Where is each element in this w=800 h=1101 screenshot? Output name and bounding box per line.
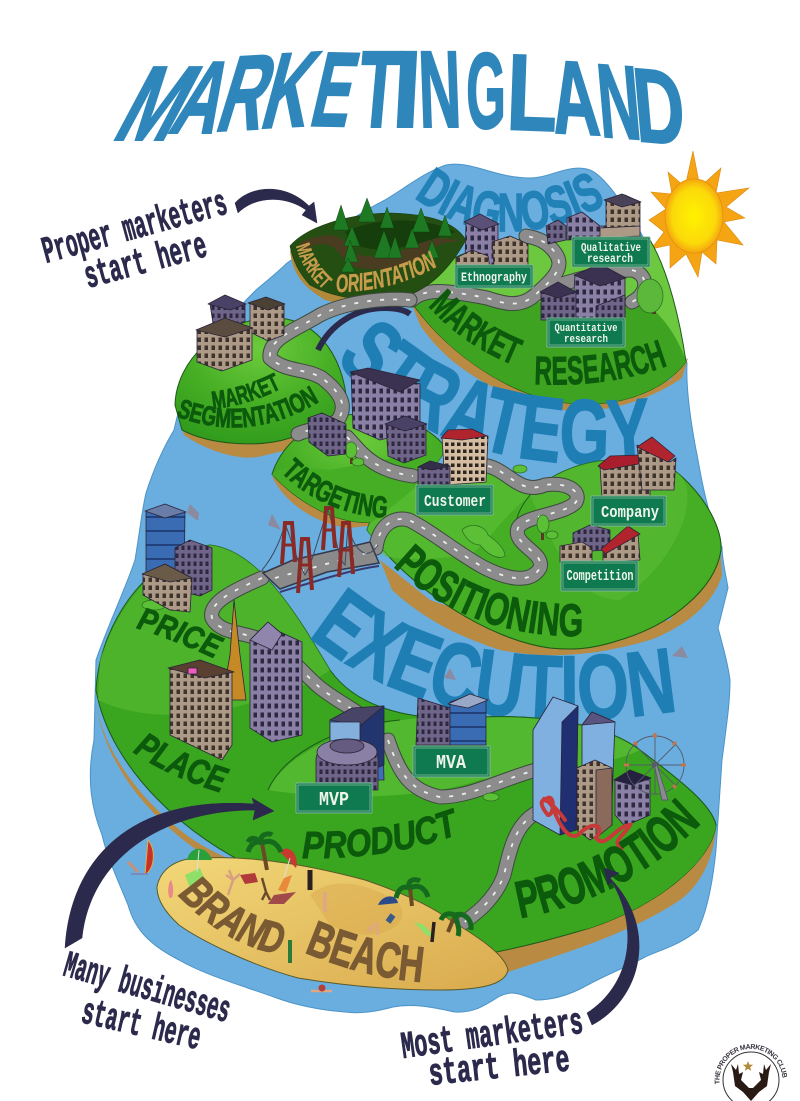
label: Price: PRICE — [136, 608, 226, 658]
label: Market Orientation: MARKET — [296, 242, 333, 288]
buildings: promotion district — [533, 697, 651, 840]
sign: Quantitative research: research — [564, 334, 608, 346]
section heading: Diagnosis: DIAGNOSIS — [415, 166, 602, 232]
sign: MVA: MVA — [436, 752, 467, 774]
sign: Competition — [561, 561, 638, 591]
callout: Many businesses start here: Many businesses — [59, 946, 235, 1034]
panel: positioning island — [367, 458, 722, 655]
arrow: proper marketers — [235, 189, 317, 223]
icon: suspension bridge — [262, 508, 379, 593]
label: Market Orientation: ORIENTATION — [336, 250, 436, 292]
sign: Qualitative research: research — [587, 253, 633, 266]
road: market research — [412, 236, 645, 304]
label: Market Research — [428, 288, 667, 386]
arrow: most marketers — [587, 868, 639, 1025]
icon: red slide — [542, 798, 630, 848]
heading: title Marketingland: N — [593, 43, 645, 163]
label: Positioning: POSITIONING — [394, 544, 582, 637]
panel: execution main island — [96, 545, 716, 985]
buildings: segmentation district — [196, 295, 285, 371]
heading: title Marketingland: M — [98, 44, 219, 163]
buildings: price and place district — [142, 504, 302, 760]
sign: Qualitative research — [572, 237, 650, 267]
sign: Customer: Customer — [424, 493, 486, 512]
redraw: land over heading overlap — [268, 437, 721, 955]
road: segmentation to targeting — [270, 299, 413, 476]
callout: Proper marketers start here: Proper marketers — [38, 184, 232, 275]
sign: MVP — [296, 783, 372, 813]
label: Promotion: PROMOTION — [514, 798, 700, 918]
label: Brand Beach: BRAND — [178, 876, 284, 952]
heading: title Marketingland: D — [629, 46, 689, 168]
icon: bushes and trees — [142, 442, 558, 801]
sign: Company: Company — [601, 504, 659, 523]
callout: Most marketers start here: start here — [427, 1040, 572, 1097]
heading: title Marketingland: A — [546, 38, 604, 158]
panel: brand beach — [157, 858, 508, 990]
label: Brand Beach — [178, 876, 424, 982]
heading: title Marketingland: K — [252, 30, 330, 152]
panel: market research island — [410, 231, 688, 411]
icon: tree — [637, 279, 663, 314]
panel: market segmentation island — [175, 318, 347, 458]
section heading: Execution: EXECUTION — [310, 587, 675, 720]
heading: title Marketingland: L — [505, 33, 560, 154]
heading: title Marketingland — [98, 28, 689, 168]
icon: pine trees — [333, 198, 452, 272]
arrow: many businesses — [65, 798, 274, 948]
label: Market Orientation — [296, 242, 436, 292]
callout: Proper marketers start here: start here — [80, 226, 212, 300]
sign: Quantitative research — [547, 318, 625, 347]
callout: Most marketers start here: Most marketers — [399, 1002, 586, 1070]
sign: Qualitative research: Qualitative — [581, 242, 641, 255]
label: Product: PRODUCT — [302, 808, 454, 859]
beach towels and figures — [168, 868, 436, 963]
sign: MVA — [413, 746, 490, 777]
buildings: diagnosis district — [456, 194, 641, 322]
label: Market Research: MARKET — [428, 288, 524, 364]
heading: title Marketingland: A — [158, 41, 250, 156]
icon: ferris wheel — [624, 733, 686, 800]
buildings: strategy district — [308, 368, 676, 562]
land labels — [132, 242, 700, 982]
sign: Ethnography: Ethnography — [461, 270, 527, 285]
water background — [90, 164, 730, 1013]
sign: Customer — [416, 485, 493, 515]
section heading: Strategy: STRATEGY — [342, 322, 648, 465]
icon: sun — [649, 151, 749, 277]
icon: sharks fins — [187, 504, 688, 680]
heading: title Marketingland: T — [354, 29, 405, 151]
heading: title Marketingland: N — [417, 28, 463, 151]
sign: MVP: MVP — [319, 789, 349, 811]
icon: windsurfer — [128, 840, 153, 875]
label: Market Research: RESEARCH — [536, 340, 667, 386]
heading: title Marketingland: I — [390, 29, 424, 151]
label: Market Segmentation: SEGMENTATION — [178, 386, 319, 428]
label: Place: PLACE — [132, 733, 230, 793]
heading: title Marketingland: G — [466, 31, 506, 151]
buildings: product district — [316, 694, 488, 790]
heading: title Marketingland: R — [206, 32, 288, 155]
label: Targeting: TARGETING — [284, 456, 387, 518]
logo: The Proper Marketing Club: THE PROPER MARKETING CLUB — [714, 1044, 787, 1084]
callout: Many businesses start here: start here — [77, 993, 204, 1061]
panel: market orientation hill — [290, 198, 466, 304]
icon: swimmer — [311, 984, 332, 992]
sign: Ethnography — [455, 265, 533, 288]
sign: Company — [591, 496, 666, 526]
road: price to product — [212, 578, 390, 745]
label: Brand Beach: BEACH — [306, 920, 424, 982]
label: Market Segmentation: MARKET — [211, 372, 278, 410]
icon: palm trees — [248, 834, 471, 936]
sign: Competition: Competition — [566, 569, 634, 585]
icon: beach umbrellas — [187, 848, 398, 905]
heading: title Marketingland: E — [302, 31, 368, 149]
sign: Quantitative research: Quantitative — [554, 323, 618, 335]
panel: targeting island — [272, 414, 446, 528]
